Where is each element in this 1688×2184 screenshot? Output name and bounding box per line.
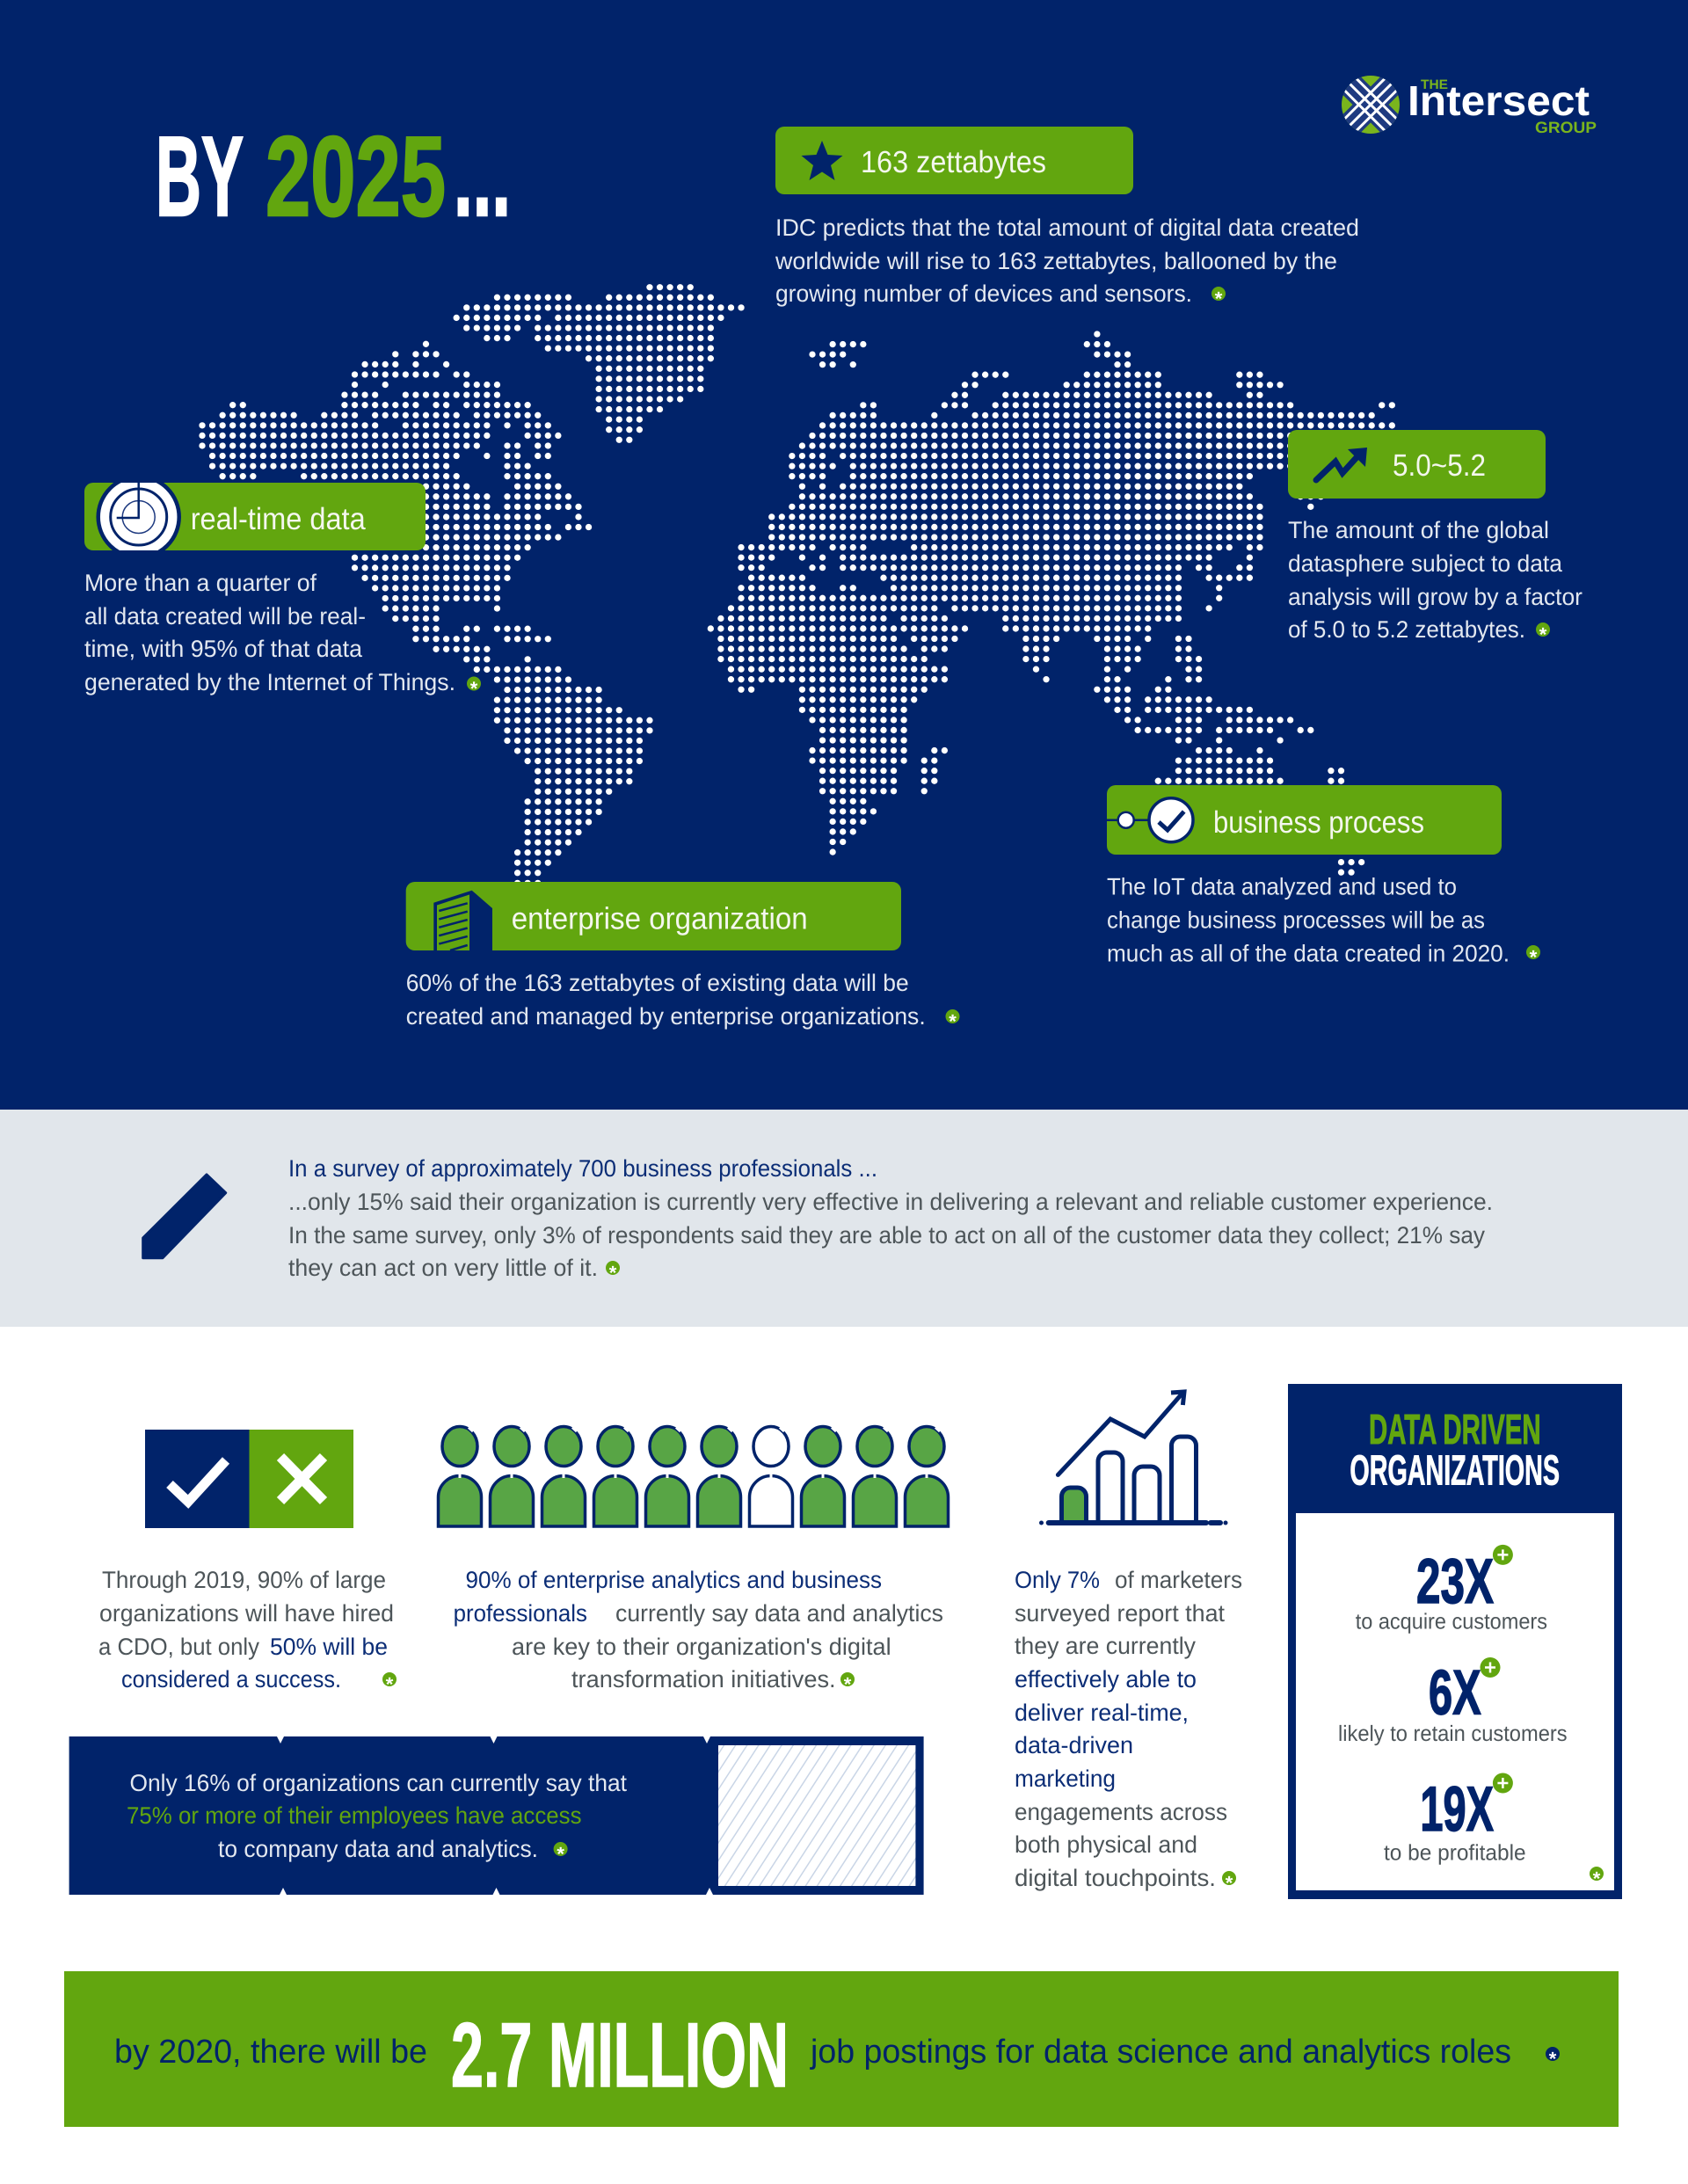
callout: 5.0 to 5.2 xyxy=(1288,430,1582,645)
heading bar: enterprise organization: enterprise organization xyxy=(512,902,808,935)
title: By 2025: 2025 xyxy=(266,113,446,240)
heading bar: 5.0~5.2: 5.0~5.2 xyxy=(1393,448,1486,483)
stat: 23X to acquire customers: 23X xyxy=(1416,1547,1494,1617)
text block: enterprise analytics statistic: professionals xyxy=(454,1600,587,1627)
text block: survey findings: In the same survey, only 3% of respondents said they are able to act on all of the customer data they collect; 21% say xyxy=(288,1222,1485,1249)
banner: 2.7 million job postings xyxy=(64,1971,1619,2127)
text block: real-time data description: generated by the Internet of Things. xyxy=(84,669,455,695)
panel: survey band xyxy=(0,1110,1688,1327)
text block: 163 zettabytes description: IDC predicts that the total amount of digital data created xyxy=(775,215,1359,241)
text block: 16% statistic: * xyxy=(557,1843,564,1865)
hatched box xyxy=(718,1745,915,1886)
text block: marketers statistic: they are currently xyxy=(1015,1633,1196,1659)
title: By 2025: BY xyxy=(156,113,244,240)
text block: marketers statistic: both physical and xyxy=(1015,1831,1197,1858)
text block: CDO statistic: a CDO, but only xyxy=(98,1634,259,1660)
text block: survey findings: * xyxy=(609,1262,617,1284)
text block: real-time data description: all data created will be real- xyxy=(84,603,366,630)
text block: marketers statistic: Only 7% xyxy=(1015,1567,1100,1593)
text block: marketers statistic: surveyed report that xyxy=(1015,1600,1225,1627)
heading: data driven organizations xyxy=(1350,1407,1560,1495)
text block: datasphere description xyxy=(1288,517,1582,645)
banner: 2.7 million job postings: 2.7 MILLION xyxy=(451,2005,789,2107)
icon: radar clock xyxy=(96,483,181,550)
icon: check and cross box xyxy=(145,1430,353,1528)
text block: survey findings: they can act on very little of it. xyxy=(288,1255,598,1281)
callout: business process xyxy=(1107,785,1540,968)
panel: data driven organizations xyxy=(1288,1384,1622,1899)
text block: marketers statistic: of marketers xyxy=(1115,1567,1242,1593)
heading bar: business process: business process xyxy=(1213,805,1424,840)
icon: row of ten people xyxy=(438,1426,948,1526)
logo: The Intersect Group: THE xyxy=(1421,77,1448,92)
stat: 6X likely to retain customers: likely to retain customers xyxy=(1338,1722,1568,1746)
text block: marketers statistic: digital touchpoints. xyxy=(1015,1865,1216,1891)
text block: 163 zettabytes description: worldwide will rise to 163 zettabytes, ballooned by the xyxy=(775,248,1337,274)
text block: enterprise analytics statistic xyxy=(454,1567,943,1695)
text block: 163 zettabytes description xyxy=(775,215,1359,309)
text block: CDO statistic: considered a success. xyxy=(121,1666,341,1693)
stat: 6X likely to retain customers xyxy=(1338,1657,1568,1746)
dot map: Europe, Africa, Asia and Australia xyxy=(710,334,1393,872)
text block: survey findings: In a survey of approximately 700 business professionals ... xyxy=(288,1155,877,1182)
heading bar: enterprise organization xyxy=(406,882,901,950)
callout: real-time data xyxy=(84,477,481,700)
stat: 19X to be profitable: 19X xyxy=(1420,1774,1494,1845)
text block: enterprise analytics statistic: currently say data and analytics xyxy=(615,1600,943,1627)
dot map: North and South America xyxy=(202,344,651,883)
text block: business process description: The IoT data analyzed and used to xyxy=(1107,874,1457,900)
logo: The Intersect Group: GROUP xyxy=(1535,119,1597,136)
text block: 16% statistic: 75% or more of their employees have access xyxy=(127,1802,582,1829)
text block: marketers statistic: data-driven xyxy=(1015,1732,1133,1758)
text block: CDO statistic: Through 2019, 90% of large xyxy=(102,1567,386,1593)
title: By 2025: ... xyxy=(454,113,511,240)
text block: enterprise analytics statistic: * xyxy=(844,1673,852,1695)
stat: 19X to be profitable: to be profitable xyxy=(1384,1841,1526,1866)
text block: business process description: much as all of the data created in 2020. xyxy=(1107,941,1510,967)
text block: CDO statistic xyxy=(98,1567,397,1695)
text block: enterprise analytics statistic: are key to their organization's digital xyxy=(512,1634,891,1660)
text block: real-time data description: More than a quarter of xyxy=(84,570,316,596)
banner: 2.7 million job postings: job postings for data science and analytics roles xyxy=(810,2034,1511,2071)
text block: 16% statistic xyxy=(127,1770,627,1865)
text block: enterprise analytics statistic: transformation initiatives. xyxy=(571,1666,836,1693)
text block: survey findings xyxy=(288,1155,1493,1284)
text block: marketers statistic: effectively able to xyxy=(1015,1666,1197,1693)
text block: enterprise description: created and managed by enterprise organizations. xyxy=(406,1003,926,1030)
text block: marketers statistic: deliver real-time, xyxy=(1015,1700,1189,1726)
text block: 163 zettabytes description: growing number of devices and sensors. xyxy=(775,280,1192,307)
text block: datasphere description: of 5.0 to 5.2 zettabytes. xyxy=(1288,616,1525,643)
text block: 163 zettabytes description: * xyxy=(1215,288,1223,309)
panel: data driven organizations: * xyxy=(1593,1867,1601,1889)
icon: pencil xyxy=(143,1175,226,1258)
icon: rising bar chart xyxy=(1039,1392,1227,1525)
text block: business process description: change business processes will be as xyxy=(1107,907,1485,934)
text block: marketers statistic: marketing xyxy=(1015,1765,1116,1792)
text block: datasphere description: datasphere subject to data xyxy=(1288,550,1563,577)
text block: datasphere description: The amount of the global xyxy=(1288,517,1549,543)
heading bar: business process xyxy=(1107,785,1502,855)
banner: 2.7 million job postings: * xyxy=(1549,2048,1557,2070)
title: By 2025 xyxy=(156,113,511,240)
callout: 163 zettabytes xyxy=(775,127,1359,309)
text block: marketers statistic xyxy=(1015,1567,1242,1894)
banner: 2.7 million job postings: by 2020, there will be xyxy=(114,2034,427,2071)
text block: enterprise description xyxy=(406,970,960,1032)
heading bar: 5.0~5.2 xyxy=(1288,430,1546,499)
text block: marketers statistic: engagements across xyxy=(1015,1799,1227,1825)
text block: survey findings: ...only 15% said their organization is currently very effective in delivering a relevant and reliable customer experience. xyxy=(288,1189,1493,1215)
text block: enterprise description: 60% of the 163 zettabytes of existing data will be xyxy=(406,970,909,996)
stat: 6X likely to retain customers: 6X xyxy=(1429,1658,1481,1729)
text block: business process description xyxy=(1107,874,1540,968)
heading bar: real-time data: real-time data xyxy=(191,502,366,536)
text block: real-time data description: time, with 95% of that data xyxy=(84,636,363,662)
panel: employee access ticket xyxy=(69,1736,924,1895)
stat: 19X to be profitable xyxy=(1384,1773,1526,1866)
text block: 16% statistic: Only 16% of organizations can currently say that xyxy=(130,1770,627,1796)
text block: datasphere description: analysis will grow by a factor xyxy=(1288,584,1582,610)
text block: marketers statistic: * xyxy=(1226,1872,1233,1894)
text block: enterprise analytics statistic: 90% of enterprise analytics and business xyxy=(466,1567,882,1593)
text block: CDO statistic: 50% will be xyxy=(270,1634,388,1660)
stat: 23X to acquire customers: to acquire customers xyxy=(1356,1610,1547,1634)
text block: business process description: * xyxy=(1530,946,1538,968)
panel: navy hero background xyxy=(0,0,1688,1110)
text block: 16% statistic: to company data and analytics. xyxy=(218,1836,538,1862)
text block: CDO statistic: * xyxy=(386,1673,394,1695)
stat: 23X to acquire customers xyxy=(1356,1545,1547,1634)
text block: real-time data description xyxy=(84,570,481,700)
text block: enterprise description: * xyxy=(949,1010,957,1032)
text block: datasphere description: * xyxy=(1539,623,1547,645)
heading bar: 163 zettabytes: 163 zettabytes xyxy=(861,145,1046,179)
logo: The Intersect Group xyxy=(1342,76,1597,134)
callout: enterprise organization xyxy=(406,882,960,1032)
dot map: Greenland xyxy=(456,288,742,440)
text block: CDO statistic: organizations will have hired xyxy=(99,1600,394,1627)
heading bar: real-time data xyxy=(84,483,426,550)
text block: real-time data description: * xyxy=(470,677,478,700)
heading: data driven organizations: DATA DRIVEN xyxy=(1369,1407,1541,1453)
logo: The Intersect Group: Intersect xyxy=(1408,78,1590,125)
heading bar: 163 zettabytes xyxy=(775,127,1133,194)
